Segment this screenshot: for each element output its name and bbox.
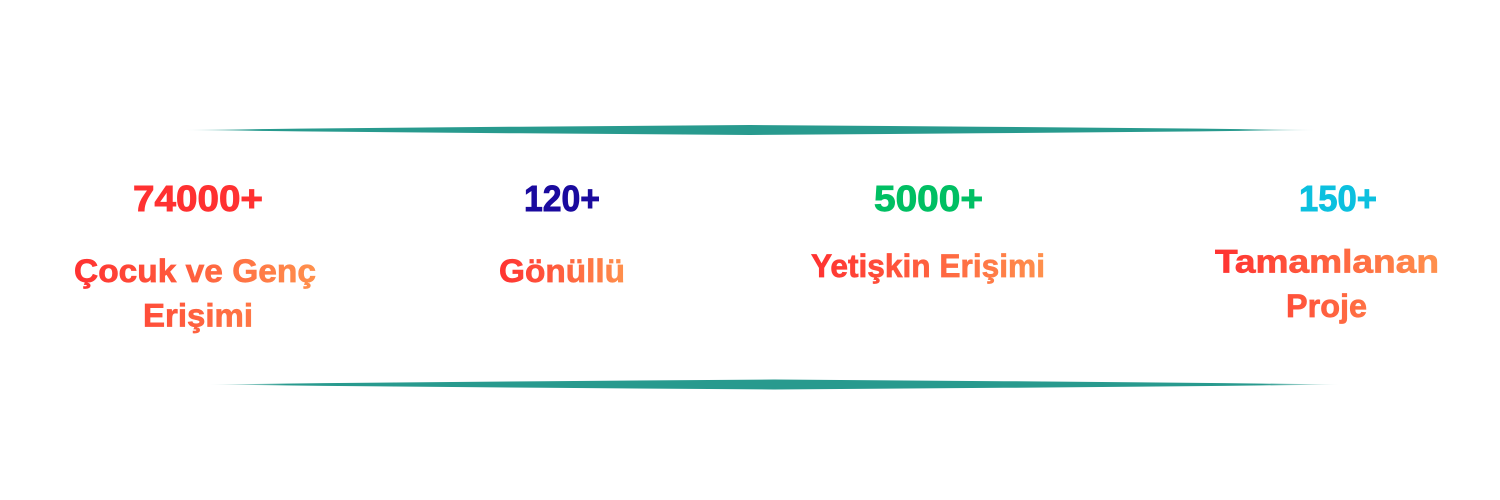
stat: completed projects xyxy=(1215,178,1439,324)
number: 74000+: 74000+ xyxy=(133,178,263,219)
label: Çocuk ve Genç Erişimi: Çocuk ve Genç xyxy=(74,253,316,289)
number: 150+: 150+ xyxy=(1299,178,1377,219)
stat: children and youth reach xyxy=(74,178,316,334)
stat: volunteers xyxy=(499,178,625,289)
top divider line xyxy=(183,125,1318,135)
label: Çocuk ve Genç Erişimi: Erişimi xyxy=(143,298,253,334)
bottom divider line xyxy=(207,380,1341,390)
stat: adult reach xyxy=(811,178,1045,284)
label: Tamamlanan Proje: Proje xyxy=(1286,288,1367,324)
label: Tamamlanan Proje: Tamamlanan xyxy=(1215,244,1439,280)
number: 120+: 120+ xyxy=(524,178,600,219)
label: Yetişkin Erişimi: Yetişkin Erişimi xyxy=(811,248,1045,284)
number: 5000+: 5000+ xyxy=(874,178,983,219)
label: Gönüllü: Gönüllü xyxy=(499,253,625,289)
